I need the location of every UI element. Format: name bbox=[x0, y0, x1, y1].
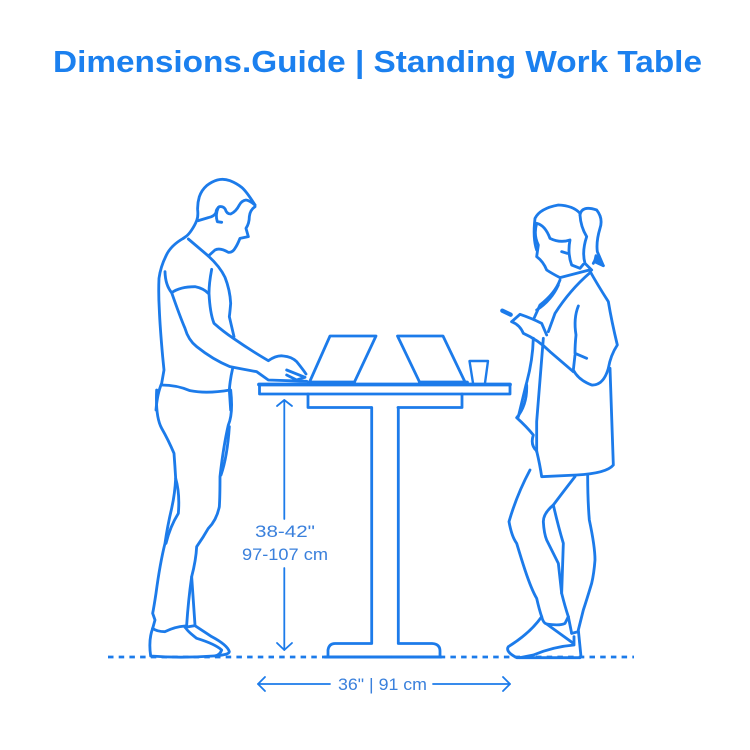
woman: head, ponytail and cardigan bbox=[502, 205, 617, 477]
laptop: left bbox=[309, 336, 376, 383]
arrow: height bbox=[277, 400, 292, 650]
laptop: right bbox=[398, 336, 467, 383]
height dimension: 97-107 cm bbox=[242, 545, 328, 564]
title: Dimensions.Guide | Standing Work Table bbox=[53, 44, 702, 79]
man: head and torso bbox=[156, 179, 307, 410]
table bbox=[259, 384, 510, 657]
ground line bbox=[108, 656, 634, 658]
table apron bbox=[308, 394, 371, 408]
table pedestal and base bbox=[328, 408, 372, 657]
height label: 38-42" bbox=[255, 522, 315, 541]
man: legs and shoe bbox=[150, 390, 232, 657]
table top bbox=[259, 384, 510, 394]
height dimension bbox=[242, 400, 328, 650]
width dimension bbox=[258, 675, 510, 694]
icon: coffee cup bbox=[470, 361, 488, 383]
figure: standing woman bbox=[502, 205, 617, 658]
figure: standing man bbox=[150, 179, 307, 657]
laptops bbox=[309, 336, 467, 383]
width label: 36" | 91 cm bbox=[338, 675, 427, 694]
woman: legs and shoes bbox=[508, 470, 595, 658]
arrows: width bbox=[258, 677, 510, 691]
